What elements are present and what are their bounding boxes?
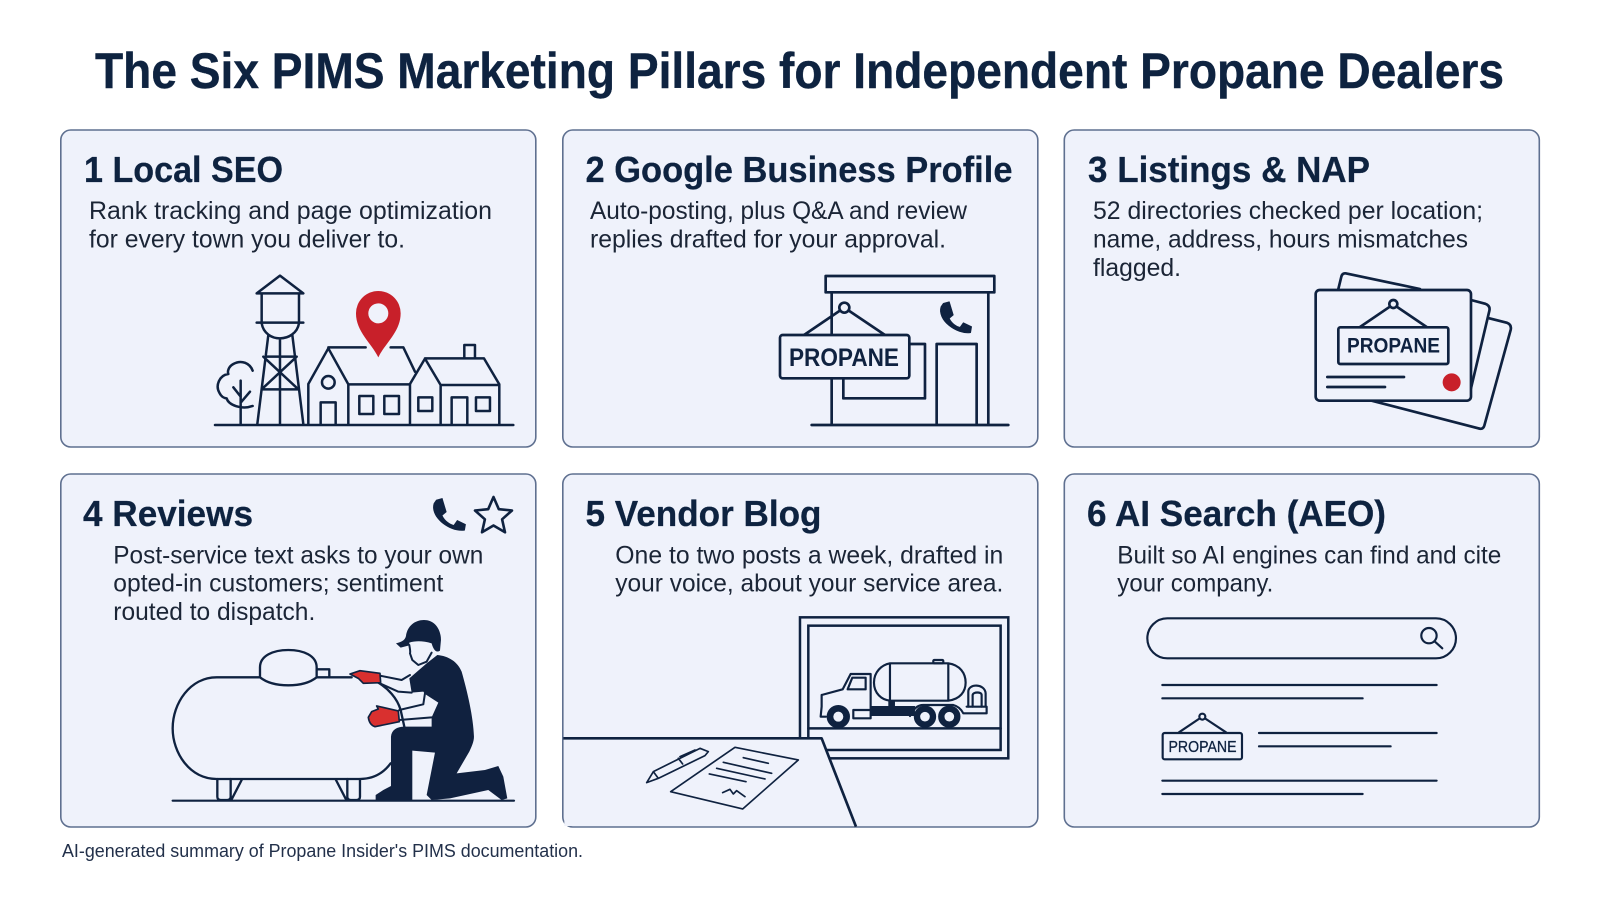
heading: reviews: 4 Reviews: [83, 493, 253, 534]
body text: google business profile: Auto-posting, plus Q&A and review: [590, 197, 968, 225]
body text: reviews: opted-in customers; sentiment: [113, 570, 443, 598]
search bar: [1147, 618, 1456, 658]
body text: google business profile: [590, 197, 968, 254]
icon: pen: [647, 748, 708, 783]
body text: listings and nap: [1093, 197, 1483, 282]
body text: local seo: Rank tracking and page optimization: [89, 197, 492, 225]
technician: [376, 620, 507, 800]
heading: listings and nap: 3 Listings & NAP: [1088, 149, 1370, 190]
tree: [218, 362, 253, 424]
body text: listings and nap: flagged.: [1093, 254, 1181, 282]
body text: local seo: [89, 197, 492, 254]
heading: local seo: 1 Local SEO: [84, 149, 283, 190]
panel: ai search: [1064, 474, 1539, 827]
icon: stacked listing cards: [1316, 273, 1511, 429]
body text: reviews: [113, 541, 483, 626]
icon: phone on storefront: [940, 302, 972, 333]
body text: google business profile: replies drafted for your approval.: [590, 226, 946, 254]
title: The Six PIMS Marketing Pillars for Independent Propane Dealers: [95, 43, 1504, 99]
body text: ai search: your company.: [1117, 570, 1273, 598]
body text: vendor blog: [615, 541, 1003, 598]
small house: [410, 345, 499, 424]
water tower: [257, 276, 303, 424]
body text: local seo: for every town you deliver to.: [89, 226, 405, 254]
panel: vendor blog: [563, 474, 1038, 827]
large house: [308, 347, 415, 424]
icon: propane truck: [821, 660, 987, 725]
body text: reviews: routed to dispatch.: [113, 598, 315, 626]
illustration: technician inspecting propane tank: [173, 620, 514, 801]
result lines: [1162, 685, 1437, 794]
window frame: [800, 617, 1008, 758]
panel: local seo: [61, 130, 536, 447]
heading: vendor blog: 5 Vendor Blog: [586, 493, 822, 534]
result sign text: PROPANE: [1168, 739, 1236, 756]
body text: ai search: [1117, 541, 1501, 598]
glove: upper: [350, 671, 381, 683]
storefront sign text: PROPANE: [789, 344, 899, 372]
location pin: [356, 291, 401, 357]
heading: ai search: 6 AI Search (AEO): [1087, 493, 1386, 534]
icon: star: [475, 497, 512, 532]
heading: google business profile: 2 Google Business Profile: [586, 149, 1012, 190]
illustration: desk and window with propane truck: [563, 617, 1008, 827]
body text: ai search: Built so AI engines can find and cite: [1117, 541, 1501, 569]
panel: reviews: [61, 474, 536, 827]
body text: vendor blog: One to two posts a week, drafted in: [615, 541, 1003, 569]
icon: phone: [433, 498, 466, 531]
body text: reviews: Post-service text asks to your own: [113, 541, 483, 569]
illustration: search bar and results: [1147, 618, 1456, 794]
desk: [564, 738, 855, 826]
icon: storefront with propane sign: [780, 276, 1008, 425]
propane tank: [173, 650, 514, 801]
icon: town with water tower, houses and location pin: [215, 276, 513, 425]
body text: vendor blog: your voice, about your service area.: [615, 570, 1003, 598]
footnote: AI-generated summary of Propane Insider's PIMS documentation.: [62, 841, 583, 861]
panel: google business profile: [563, 130, 1038, 447]
body text: listings and nap: 52 directories checked per location;: [1093, 197, 1483, 225]
icon: document: [671, 747, 798, 809]
result sign: [1163, 714, 1242, 759]
listing card sign text: PROPANE: [1347, 334, 1440, 357]
panel: listings and nap: [1064, 130, 1539, 447]
body text: listings and nap: name, address, hours mismatches: [1093, 226, 1468, 254]
glove: lower: [368, 706, 399, 727]
